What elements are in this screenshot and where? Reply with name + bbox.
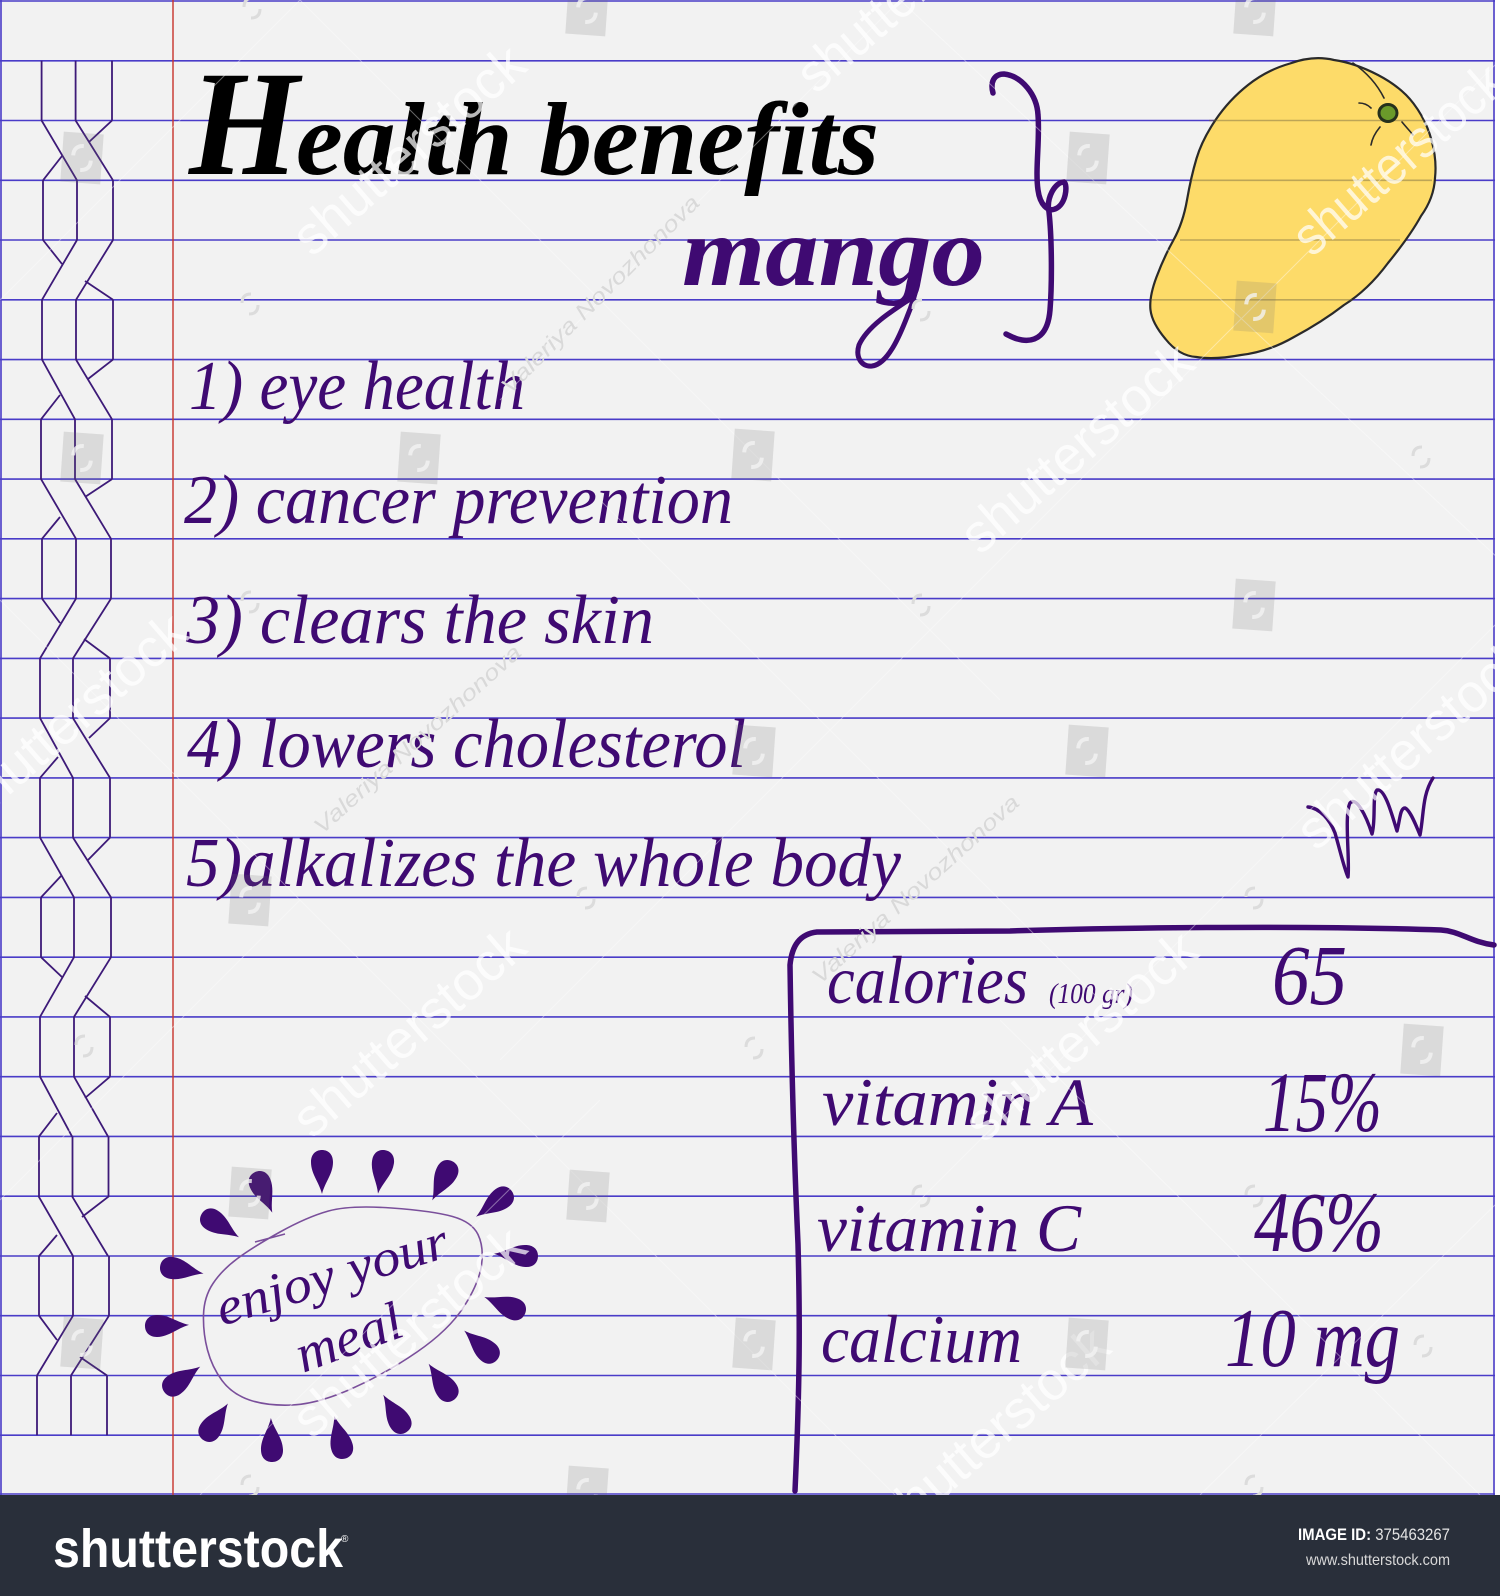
title: ealth benefits — [296, 82, 879, 197]
footer registered mark: ® — [341, 1534, 349, 1545]
value: calories: 65 — [1272, 927, 1347, 1023]
badge: enjoy your meal — [145, 1148, 539, 1462]
red margin line — [172, 0, 174, 1495]
subtitle: mango: mango — [682, 196, 985, 307]
watermark word: top left: shutterstock — [281, 32, 538, 267]
benefits list — [184, 348, 902, 902]
watermark word: bottom: shutterstock — [865, 1314, 1122, 1549]
curly bracket — [992, 74, 1066, 340]
label: calories: calories — [827, 942, 1028, 1018]
watermark word: lower left: shutterstock — [281, 914, 538, 1149]
footer bar — [0, 1495, 1500, 1596]
label: vitamin A: vitamin A — [822, 1064, 1093, 1140]
radiating drops — [145, 1148, 539, 1462]
badge outline — [203, 1207, 482, 1405]
label: vitamin C: vitamin C — [817, 1190, 1082, 1266]
item 2: 2) cancer prevention — [184, 462, 733, 539]
watermark word: center: shutterstock — [949, 330, 1206, 565]
braid ornament — [37, 61, 113, 1435]
table bracket border — [790, 927, 1494, 1491]
value: vitamin A: 15% — [1263, 1054, 1382, 1150]
watermark word: badge: shutterstock — [281, 1214, 538, 1449]
item 5: 5)alkalizes the whole body — [186, 825, 902, 902]
badge text: meal: meal — [287, 1290, 410, 1384]
nutrition table — [790, 927, 1494, 1491]
subtitle: mango — [682, 196, 985, 366]
watermark word: lower center: shutterstock — [953, 918, 1210, 1153]
icon: mango — [1150, 58, 1436, 358]
squiggle mark — [1308, 778, 1433, 877]
note: per 100 gr: (100 gr) — [1049, 979, 1133, 1010]
item 4: 4) lowers cholesterol — [187, 706, 746, 783]
contributor name: middle: Valeriya Novozhonova — [309, 639, 526, 839]
title: H — [187, 41, 303, 207]
value: vitamin C: 46% — [1254, 1174, 1384, 1270]
value: calcium: 10 mg — [1225, 1292, 1400, 1385]
footer website: www.shutterstock.com — [1305, 1552, 1450, 1569]
footer logo: shutterstock — [53, 1519, 344, 1579]
footer image id: IMAGE ID: 375463267 — [1298, 1525, 1450, 1544]
badge text: enjoy your: enjoy your — [209, 1213, 456, 1337]
label: calcium: calcium — [821, 1301, 1022, 1377]
item 3: 3) clears the skin — [185, 582, 654, 659]
contributor name: table: Valeriya Novozhonova — [807, 789, 1024, 989]
contributor name: top: Valeriya Novozhonova — [496, 190, 704, 399]
item 1: 1) eye health — [189, 348, 525, 425]
